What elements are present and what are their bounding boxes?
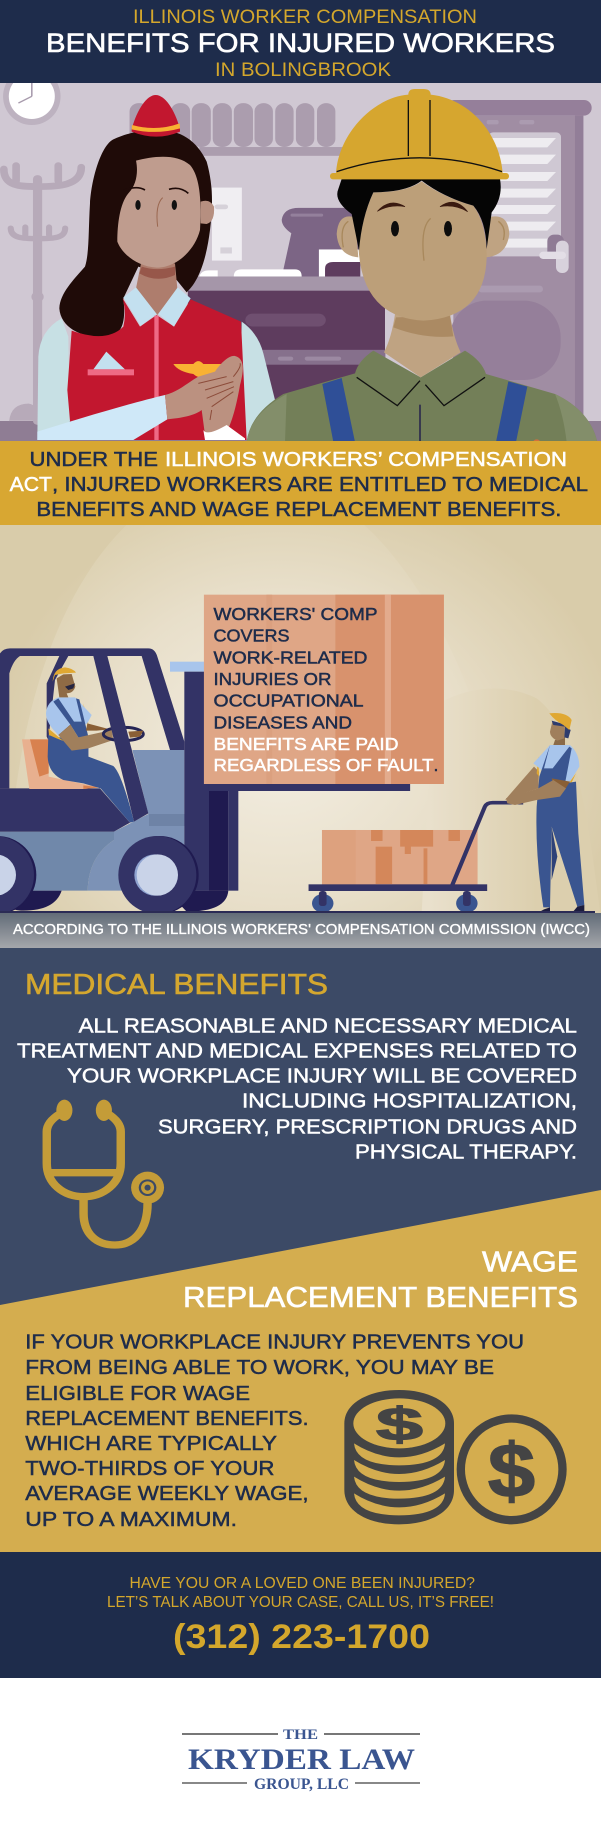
heading: medical benefits: MEDICAL BENEFITS bbox=[25, 969, 328, 1001]
source band: ACCORDING TO THE ILLINOIS WORKERS' COMPENSATION COMMISSION (IWCC) bbox=[13, 922, 590, 938]
figure: flight attendant bbox=[37, 95, 275, 440]
text block: workers' comp covers: COVERS bbox=[214, 626, 290, 646]
panel: call to action: (312) 223-1700 bbox=[173, 1618, 430, 1656]
logo: the kryder law group: GROUP, LLC bbox=[254, 1776, 349, 1793]
text block: medical coverage: SURGERY, PRESCRIPTION DRUGS AND bbox=[158, 1115, 577, 1138]
panel: header: IN BOLINGBROOK bbox=[215, 60, 391, 81]
panel: act statement band: ILLINOIS WORKERS’ COMPENSATION bbox=[165, 448, 567, 471]
office door with blinds bbox=[385, 100, 592, 421]
text block: workers' comp covers: WORK-RELATED bbox=[214, 647, 368, 667]
text block: wage benefits: TWO-THIRDS OF YOUR bbox=[25, 1457, 274, 1480]
forklift bbox=[0, 648, 238, 914]
logo: the kryder law group: KRYDER LAW bbox=[188, 1743, 415, 1776]
icon: wall clock bbox=[3, 68, 61, 125]
panel: act statement band bbox=[0, 441, 601, 525]
text block: workers' comp covers: REGARDLESS OF FAULT bbox=[214, 755, 434, 775]
heading: wage replacement benefits: REPLACEMENT BENEFITS bbox=[183, 1282, 578, 1314]
text block: wage benefits: IF YOUR WORKPLACE INJURY PREVENTS YOU bbox=[25, 1330, 524, 1353]
text block: wage benefits: WHICH ARE TYPICALLY bbox=[25, 1432, 277, 1455]
panel: medical benefits bbox=[0, 948, 601, 1328]
icon: coin stack and coin: $ bbox=[376, 1398, 423, 1450]
rear wheel bbox=[0, 836, 36, 914]
text block: workers' comp covers: WORKERS' COMP bbox=[214, 604, 378, 624]
cart worker bbox=[505, 713, 584, 913]
panel: header bbox=[0, 0, 601, 83]
heading: wage replacement benefits: WAGE bbox=[482, 1247, 578, 1279]
text block: medical coverage: TREATMENT AND MEDICAL EXPENSES RELATED TO bbox=[17, 1040, 577, 1063]
panel: act statement band: ACT bbox=[10, 473, 52, 496]
icon: stethoscope bbox=[47, 1100, 164, 1245]
text block: workers' comp covers: INJURIES OR bbox=[214, 669, 332, 689]
icon: coin stack and coin bbox=[344, 1390, 567, 1524]
desk with papers and chair bbox=[188, 188, 387, 424]
panel: call to action bbox=[0, 1552, 601, 1678]
panel: header: ILLINOIS WORKER COMPENSATION bbox=[133, 7, 477, 28]
illustration: warehouse backdrop bbox=[0, 525, 601, 913]
panel: call to action: HAVE YOU OR A LOVED ONE BEEN INJURED? bbox=[130, 1575, 475, 1592]
icon: coin stack and coin: $ bbox=[488, 1429, 535, 1514]
forklift driver bbox=[46, 667, 143, 823]
text block: medical coverage: ALL REASONABLE AND NECESSARY MEDICAL bbox=[79, 1015, 577, 1038]
text block: wage benefits: UP TO A MAXIMUM. bbox=[25, 1508, 237, 1531]
text block: workers' comp covers: BENEFITS ARE PAID bbox=[214, 734, 398, 754]
text block: workers' comp covers: DISEASES AND bbox=[214, 712, 352, 732]
panel: call to action: LET’S TALK ABOUT YOUR CASE, CALL US, IT’S FREE! bbox=[107, 1594, 494, 1611]
text block: workers' comp covers: . bbox=[434, 755, 438, 775]
figure: construction worker bbox=[247, 89, 597, 447]
panel: act statement band: , INJURED WORKERS ARE ENTITLED TO MEDICAL bbox=[52, 473, 588, 496]
heading: wage replacement benefits bbox=[183, 1247, 578, 1314]
source band bbox=[0, 913, 601, 948]
text block: medical coverage: INCLUDING HOSPITALIZATION, bbox=[242, 1090, 577, 1113]
logo: the kryder law group: THE bbox=[283, 1727, 318, 1743]
bookshelf with binders bbox=[130, 103, 345, 156]
cart with boxes bbox=[309, 803, 523, 913]
text block: wage benefits: AVERAGE WEEKLY WAGE, bbox=[25, 1482, 309, 1505]
panel: header: BENEFITS FOR INJURED WORKERS bbox=[46, 28, 555, 58]
large carton on forks bbox=[204, 595, 444, 791]
text block: wage benefits: REPLACEMENT BENEFITS. bbox=[25, 1407, 309, 1430]
panel: act statement band: BENEFITS AND WAGE REPLACEMENT BENEFITS. bbox=[36, 498, 561, 521]
logo: the kryder law group bbox=[182, 1727, 420, 1793]
text block: medical coverage bbox=[17, 1015, 577, 1163]
panel: wage replacement benefits bbox=[0, 1190, 601, 1552]
text block: medical coverage: PHYSICAL THERAPY. bbox=[355, 1140, 577, 1163]
text block: workers' comp covers: OCCUPATIONAL bbox=[214, 690, 364, 710]
text block: workers' comp covers bbox=[214, 604, 438, 775]
office furniture bbox=[3, 68, 387, 424]
illustration: office backdrop bbox=[0, 68, 601, 441]
text block: wage benefits: ELIGIBLE FOR WAGE bbox=[25, 1382, 250, 1405]
front wheel bbox=[118, 836, 199, 914]
text block: medical coverage: YOUR WORKPLACE INJURY WILL BE COVERED bbox=[67, 1065, 577, 1088]
seat bbox=[22, 739, 100, 789]
panel: act statement band: UNDER THE bbox=[30, 448, 158, 471]
text block: wage benefits bbox=[25, 1330, 524, 1531]
text block: wage benefits: FROM BEING ABLE TO WORK, YOU MAY BE bbox=[25, 1356, 494, 1379]
coat rack bbox=[4, 166, 81, 421]
